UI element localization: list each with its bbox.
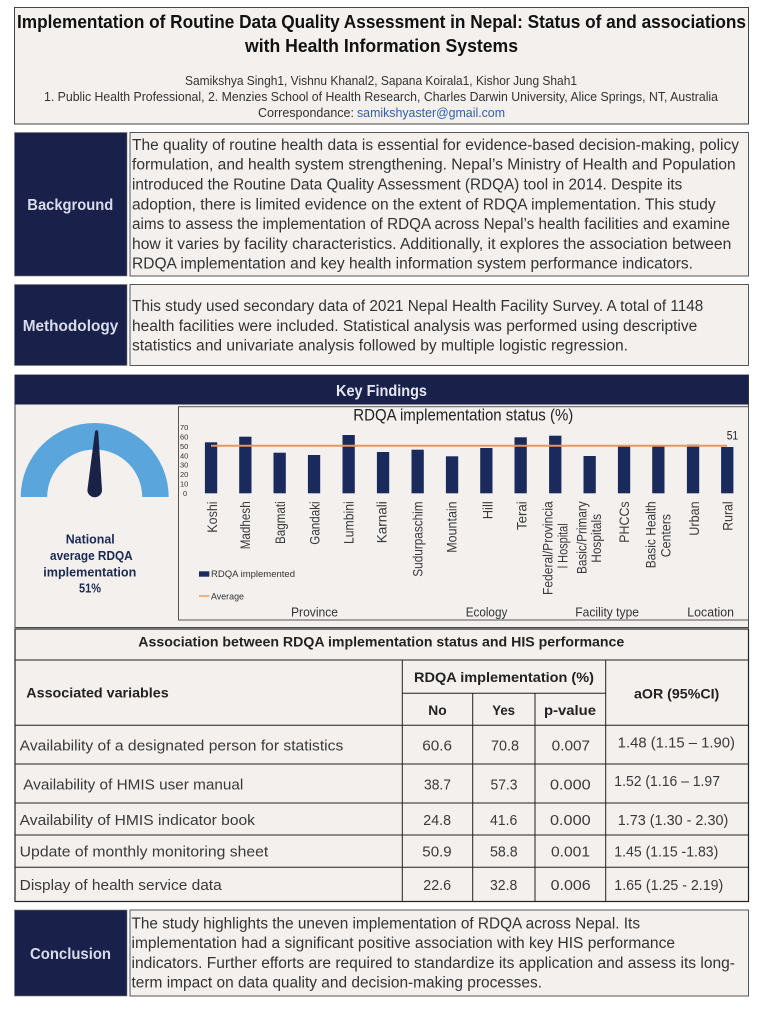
title [17, 11, 746, 56]
background text: formulation, and health system strengthening. Nepal’s Ministry of Health and Population [132, 157, 736, 174]
title: with Health Information Systems [244, 35, 518, 56]
methodology label [14, 284, 127, 366]
y axis labels: 0 [183, 489, 187, 498]
panel: methodology [14, 284, 748, 366]
bars [205, 435, 733, 493]
gauge caption: implementation [43, 566, 136, 580]
gauge caption: 51% [79, 582, 101, 596]
methodology text: This study used secondary data of 2021 Nepal Health Facility Survey. A total of 1148 [132, 298, 703, 315]
group labels [291, 605, 734, 620]
table header: RDQA implementation (%) [414, 669, 594, 685]
table row: service data: 0.006 [551, 878, 591, 894]
table row: service data: Display of health service data [20, 878, 223, 894]
gauge caption: National [66, 532, 115, 546]
table row: monitoring sheet: 0.001 [551, 845, 590, 861]
category labels: Basic/Primary [575, 501, 590, 574]
category labels: l Hospital [555, 523, 570, 568]
table row: indicator book: 0.000 [550, 813, 591, 829]
methodology text: statistics and univariate analysis followed by multiple logistic regression. [132, 338, 628, 355]
table row: monitoring sheet: 1.45 (1.15 -1.83) [614, 845, 718, 861]
table row: indicator book: Availability of HMIS indicator book [20, 813, 256, 829]
y axis labels [180, 423, 188, 498]
group labels: Ecology [466, 605, 508, 620]
table header: Yes [492, 702, 515, 718]
table row: service data: 32.8 [490, 878, 517, 894]
group labels: Location [687, 605, 734, 620]
key findings heading [14, 375, 748, 404]
background text: The quality of routine health data is essential for evidence-based decision-making, policy [132, 137, 739, 154]
table header: aOR (95%CI) [634, 685, 719, 701]
category labels: Lumbini [341, 501, 356, 544]
conclusion label: Conclusion [30, 946, 111, 963]
panel: background [14, 132, 748, 276]
table row: indicator book: 1.73 (1.30 - 2.30) [618, 813, 728, 829]
authors and affiliations [44, 74, 718, 120]
gauge caption [43, 532, 136, 596]
table row: user manual: 1.52 (1.16 – 1.97 [614, 774, 720, 790]
table: association between RDQA implementation and HIS performance [15, 629, 748, 902]
panel: key findings [14, 375, 748, 628]
category labels: Karnali [375, 501, 390, 543]
key findings heading: Key Findings [336, 383, 427, 400]
methodology text [130, 284, 748, 366]
background label: Background [27, 197, 113, 214]
conclusion text: term impact on data quality and decision-making processes. [132, 975, 542, 992]
panel: conclusion [14, 910, 748, 996]
table row: designated person: 0.007 [552, 739, 590, 755]
category labels: Centers [659, 514, 674, 557]
background text: adoption, there is limited evidence on the extent of RDQA implementation. This study [132, 196, 716, 213]
category labels: Basic Health [644, 501, 659, 568]
methodology text: health facilities were included. Statistical analysis was performed using descriptive [132, 318, 697, 335]
y axis labels: 10 [180, 480, 188, 488]
category labels: Bagmati [273, 501, 288, 544]
panel: title block [14, 8, 748, 124]
background label [14, 132, 127, 276]
table row: service data [20, 878, 723, 894]
background text: aims to assess the implementation of RDQA across Nepal’s health facilities and examine [132, 216, 730, 233]
average line [211, 445, 727, 447]
y axis labels: 40 [180, 451, 188, 460]
table row: indicator book [20, 813, 728, 829]
table row: monitoring sheet [20, 845, 718, 861]
category labels: Madhesh [238, 501, 253, 549]
table row: designated person: Availability of a designated person for statistics [20, 739, 343, 755]
bar chart: RDQA implementation status [178, 407, 748, 620]
table header: Associated variables [26, 685, 169, 701]
category labels: Federal/Provincia [540, 501, 555, 595]
conclusion label [14, 910, 127, 996]
background text: introduced the Routine Data Quality Assessment (RDQA) tool in 2014. Despite its [132, 176, 683, 193]
table row: monitoring sheet: 58.8 [490, 845, 518, 861]
y axis labels: 30 [180, 460, 188, 470]
category labels: Gandaki [307, 501, 322, 545]
average value label: 51 [727, 428, 738, 442]
conclusion text: The study highlights the uneven implementation of RDQA across Nepal. Its [132, 915, 640, 932]
legend: Average [211, 591, 244, 602]
y axis labels: 60 [180, 432, 188, 442]
table header [26, 669, 719, 718]
chart title: RDQA implementation status (%) [353, 407, 573, 425]
category labels: Hill [480, 501, 495, 519]
table row: indicator book: 41.6 [490, 813, 517, 829]
methodology label: Methodology [23, 318, 119, 335]
table row: designated person [20, 735, 735, 755]
category labels: Hospitals [589, 514, 604, 563]
conclusion text: indicators. Further efforts are required to standardize its application and assess its long- [132, 955, 735, 972]
background text [130, 132, 748, 276]
group labels: Province [291, 605, 338, 620]
table row: service data: 22.6 [423, 878, 451, 894]
table row: designated person: 60.6 [422, 739, 452, 755]
y axis labels: 70 [180, 423, 188, 432]
category labels: Urban [687, 501, 702, 536]
table row: user manual: Availability of HMIS user manual [23, 777, 243, 793]
gauge caption: average RDQA [50, 549, 133, 563]
category labels: Terai [514, 501, 529, 530]
table row: user manual: 0.000 [550, 777, 591, 793]
authors and affiliations: 1. Public Health Professional, 2. Menzies School of Health Research, Charles Darwin University, Alice Springs, NT, Australia [44, 90, 718, 104]
icon: gauge [21, 423, 169, 497]
table row: indicator book: 24.8 [423, 813, 451, 829]
category labels: Mountain [445, 501, 460, 553]
background text: RDQA implementation and key health information system performance indicators. [132, 256, 693, 273]
y axis labels: 20 [180, 470, 188, 479]
table header: p-value [544, 702, 596, 718]
y axis labels: 50 [180, 442, 188, 451]
table row: service data: 1.65 (1.25 - 2.19) [614, 878, 723, 894]
authors and affiliations: Correspondance: [258, 106, 354, 120]
category labels: Rural [720, 501, 735, 531]
legend [199, 569, 295, 602]
table row: user manual [23, 774, 720, 793]
authors and affiliations: Samikshya Singh1, Vishnu Khanal2, Sapana Koirala1, Kishor Jung Shah1 [185, 74, 577, 88]
table row: user manual: 38.7 [424, 777, 451, 793]
table title: Association between RDQA implementation status and HIS performance [138, 635, 625, 650]
table row: designated person: 70.8 [491, 739, 519, 755]
table row: user manual: 57.3 [490, 777, 518, 793]
legend: RDQA implemented [211, 569, 295, 580]
background text: how it varies by facility characteristics. Additionally, it explores the association between [132, 236, 731, 253]
category labels: PHCCs [617, 501, 632, 543]
authors and affiliations: samikshyaster@gmail.com [357, 106, 505, 120]
table header: No [428, 702, 447, 718]
conclusion text [130, 910, 748, 996]
category labels: Sudurpaschim [410, 501, 425, 577]
table row: designated person: 1.48 (1.15 – 1.90) [618, 735, 735, 751]
table row: monitoring sheet: 50.9 [422, 845, 452, 861]
group labels: Facility type [575, 605, 639, 620]
table row: monitoring sheet: Update of monthly monitoring sheet [20, 845, 268, 861]
conclusion text: implementation had a significant positive association with key HIS performance [132, 935, 675, 952]
category labels [205, 501, 735, 595]
category labels: Koshi [205, 501, 220, 533]
